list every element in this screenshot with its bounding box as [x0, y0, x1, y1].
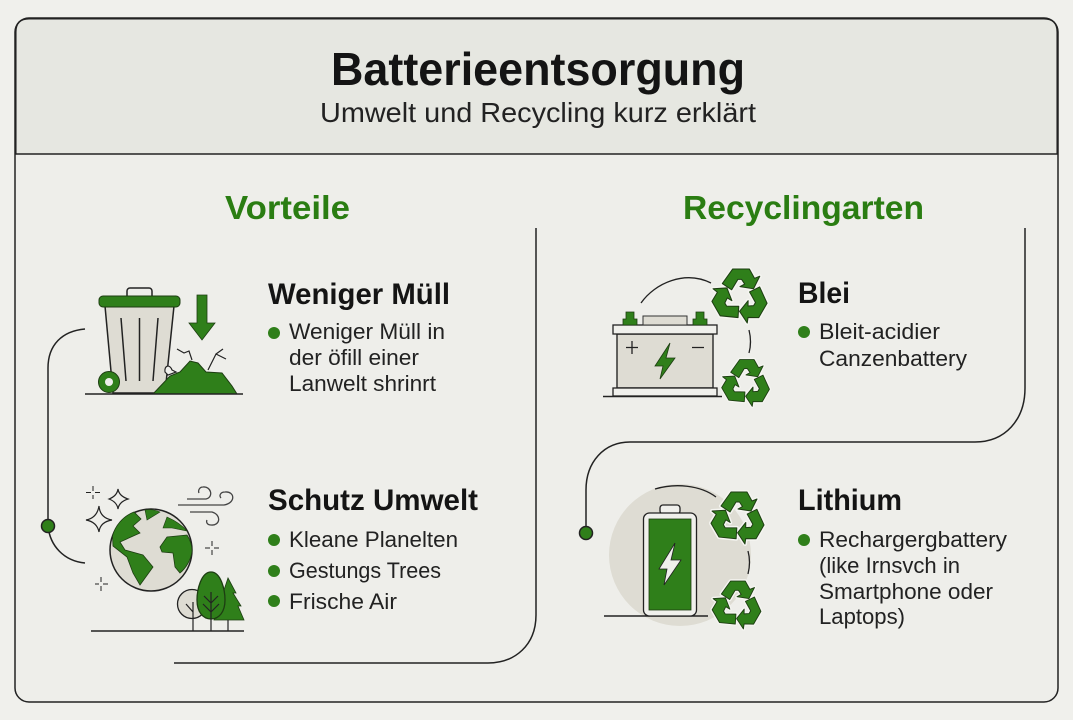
text: Blei: [798, 277, 967, 371]
text: Schutz Umwelt: Gestungs Trees: [289, 558, 441, 583]
text: Schutz Umwelt: Frische Air: [289, 589, 397, 614]
text: Weniger Müll: Weniger Müll: [268, 278, 450, 311]
text: Schutz Umwelt: [268, 484, 478, 614]
connector: centre divider: [174, 228, 536, 663]
text: Weniger Müll: [268, 278, 450, 396]
text: Lithium: Rechargergbattery: [819, 527, 1007, 552]
header band: [16, 19, 1057, 154]
title: Batterieentsorgung: [331, 43, 745, 95]
text: Lithium: Smartphone oder: [819, 579, 993, 604]
text: Schutz Umwelt: Kleane Planelten: [289, 527, 458, 552]
heading: Vorteile: Vorteile: [225, 189, 350, 226]
text: Lithium: Laptops): [819, 604, 905, 629]
icon: lithium battery with recycling symbols: [604, 484, 769, 632]
text: Blei: Bleit-acidier: [819, 319, 940, 344]
text: Weniger Müll: Weniger Müll in: [289, 319, 445, 344]
text: Weniger Müll: der öfill einer: [289, 345, 419, 370]
text: Schutz Umwelt: Schutz Umwelt: [268, 484, 478, 517]
text: Blei: Canzenbattery: [819, 346, 967, 371]
subtitle: Umwelt und Recycling kurz erklärt: [320, 97, 756, 128]
heading: Recyclingarten: Recyclingarten: [683, 189, 924, 226]
text: Lithium: Lithium: [798, 484, 902, 517]
icon: globe with trees: [86, 486, 244, 631]
icon: trash bin and waste: [85, 288, 243, 394]
connector: left timeline: [42, 329, 85, 563]
icon: lead battery with recycling symbols: [603, 269, 774, 410]
text: Weniger Müll: Lanwelt shrinrt: [289, 371, 436, 396]
connector: right timeline: [580, 228, 1025, 540]
text: Blei: Blei: [798, 277, 850, 310]
text: Lithium: (like Irnsvch in: [819, 553, 960, 578]
text: Lithium: [798, 484, 1007, 629]
